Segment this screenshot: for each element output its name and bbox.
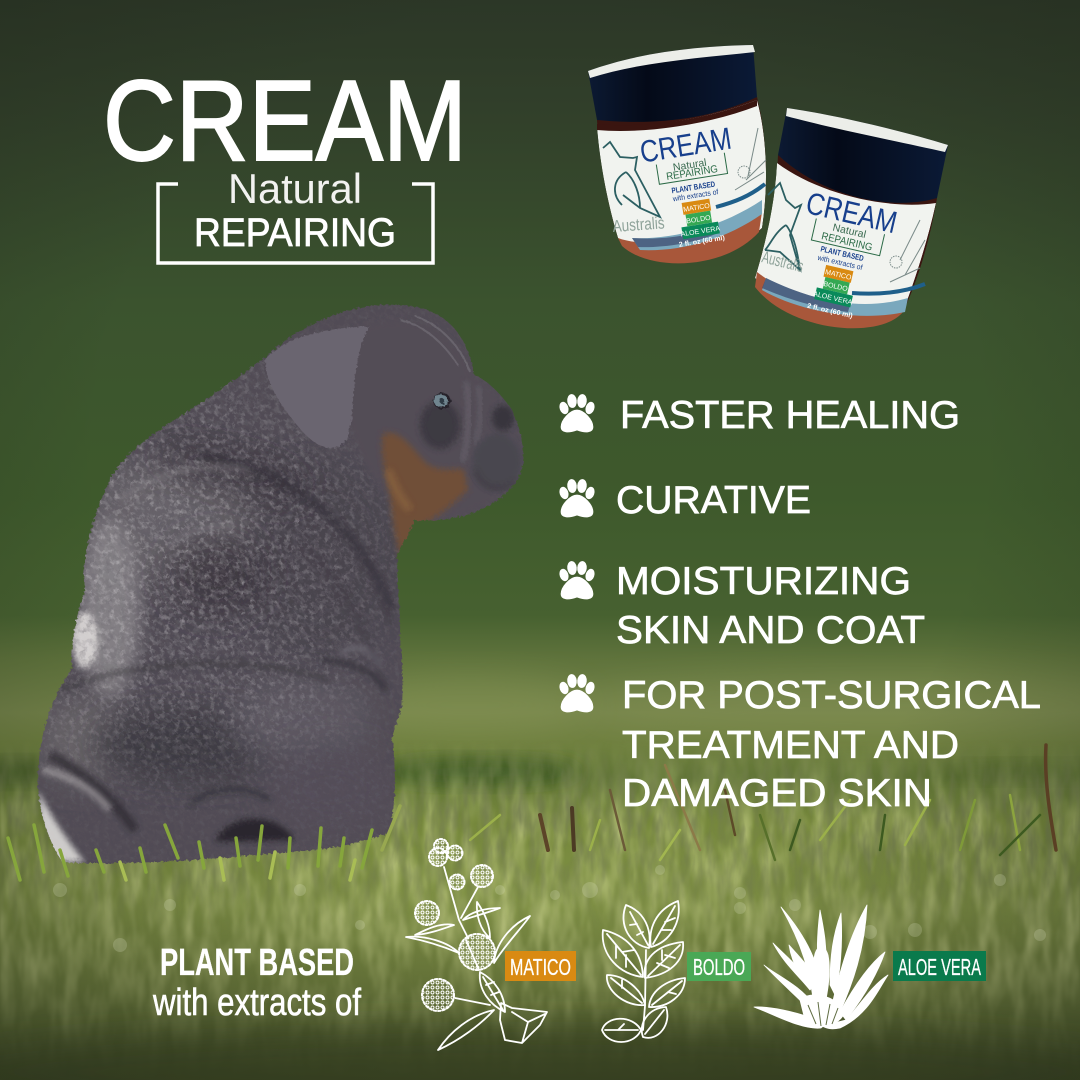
- plant based caption: [152, 942, 361, 1024]
- terracotta jar base: [618, 212, 762, 263]
- benefit: moisturizing: [558, 560, 925, 652]
- jar logo: [603, 142, 660, 217]
- dog ear: [265, 327, 370, 448]
- illustration: matico plant: [406, 839, 547, 1050]
- grass blades in front of dog: [8, 806, 400, 880]
- heading: CREAM: CREAM: [103, 58, 467, 185]
- jar lid: [778, 108, 948, 203]
- icon: paw: [558, 394, 596, 432]
- benefit: post-surgical: DAMAGED SKIN: [622, 772, 932, 815]
- benefit: moisturizing: SKIN AND COAT: [616, 609, 925, 652]
- dog photo illustration: [30, 295, 530, 870]
- label wave: [632, 200, 762, 250]
- jar label text: 2 fl. oz (60 ml): [679, 235, 725, 249]
- subheading: Natural: Natural: [228, 165, 362, 212]
- jar label text: BOLDO: [823, 281, 849, 293]
- benefit: curative: CURATIVE: [616, 479, 811, 522]
- benefit: post-surgical: [558, 674, 1041, 815]
- jar plant sketch: [735, 128, 766, 190]
- jar label text: [637, 121, 747, 253]
- jar label text: ALOE VERA: [813, 291, 853, 307]
- product jar: right: [755, 108, 948, 328]
- jar label text: PLANT BASED: [671, 180, 716, 195]
- jar label text: Natural: [831, 222, 867, 241]
- label: matico: [505, 951, 576, 981]
- jar label text: REPAIRING: [665, 163, 719, 183]
- jar logo: [765, 183, 801, 270]
- jar label text: Natural: [672, 157, 707, 174]
- title block: [103, 58, 467, 263]
- plant based caption: PLANT BASED: [160, 942, 354, 984]
- jar label text: with extracts of: [816, 253, 864, 272]
- dog head shading: [345, 316, 523, 557]
- jar plant sketch: [890, 220, 925, 282]
- subheading: REPAIRING: REPAIRING: [194, 211, 396, 255]
- illustration: aloe vera plant: [754, 905, 888, 1029]
- label: matico: MATICO: [510, 954, 571, 980]
- jar label text: REPAIRING: [820, 230, 874, 254]
- jar label text: MATICO: [683, 203, 711, 214]
- jar brand name: Australis: [612, 213, 665, 236]
- product jar: left: [588, 45, 766, 263]
- benefit: post-surgical: TREATMENT AND: [622, 724, 959, 767]
- jar label text: MATICO: [824, 269, 852, 282]
- jar lid: [588, 45, 757, 122]
- icon: paw: [558, 561, 596, 599]
- foreground grass blades, right side: [470, 745, 1056, 860]
- illustration: boldo plant: [602, 901, 685, 1042]
- plant based caption: with extracts of: [152, 982, 361, 1024]
- label: aloe vera: ALOE VERA: [898, 954, 981, 980]
- jar label text: CREAM: [803, 185, 900, 240]
- jar label text: BOLDO: [686, 215, 712, 225]
- icon: paw: [558, 479, 596, 517]
- label: boldo: [687, 952, 751, 981]
- benefit list: [558, 394, 1041, 815]
- jar label text: [783, 185, 900, 325]
- benefit: faster healing: FASTER HEALING: [620, 394, 960, 437]
- jar label text: with extracts of: [671, 187, 720, 203]
- label: boldo: BOLDO: [693, 954, 745, 980]
- benefit: post-surgical: FOR POST-SURGICAL: [622, 674, 1041, 717]
- terracotta jar base: [755, 272, 906, 328]
- bracket frame: [158, 184, 433, 263]
- label wave: [762, 278, 908, 316]
- icon: paw: [558, 674, 596, 712]
- jar label text: 2 fl. oz (60 ml): [806, 303, 853, 320]
- jar label text: CREAM: [637, 121, 734, 170]
- bokeh highlights in the grass: [53, 865, 1046, 952]
- jar label text: PLANT BASED: [820, 244, 865, 263]
- jar brand name: Australis: [760, 247, 805, 276]
- jar label text: ALOE VERA: [680, 225, 721, 239]
- benefit: moisturizing: MOISTURIZING: [616, 560, 911, 603]
- label: aloe vera: [893, 951, 986, 981]
